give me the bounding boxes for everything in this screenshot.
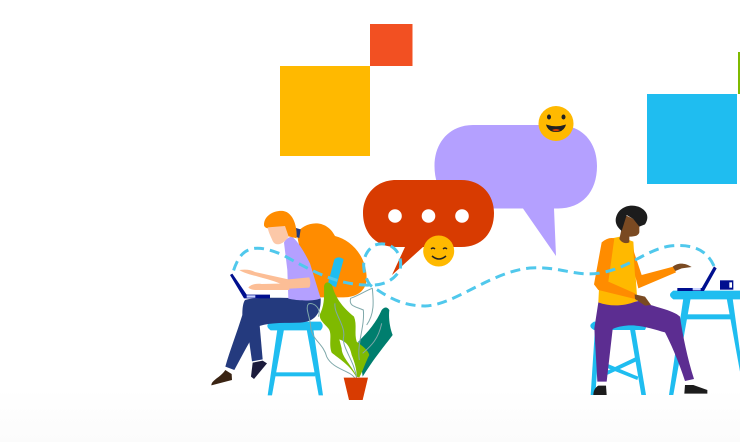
shoes bbox=[593, 386, 607, 395]
yellow square bbox=[280, 66, 370, 156]
woman on stool with laptop bbox=[211, 211, 367, 395]
mug bbox=[720, 280, 733, 290]
trousers bbox=[225, 298, 321, 370]
thin stems bbox=[307, 288, 382, 378]
hair tie bbox=[295, 228, 301, 238]
man at table with laptop bbox=[590, 206, 740, 395]
stool bbox=[267, 322, 323, 395]
potted plant bbox=[307, 282, 393, 400]
green square edge bbox=[738, 52, 740, 94]
hair bbox=[616, 206, 647, 231]
hand on thigh bbox=[635, 294, 651, 306]
pot bbox=[344, 378, 368, 400]
far trouser leg bbox=[247, 322, 263, 361]
face bbox=[268, 226, 289, 244]
smiling emoji on purple bubble bbox=[538, 106, 574, 141]
purple shirt bbox=[284, 237, 321, 301]
arms bbox=[239, 270, 310, 289]
blue chair back bbox=[328, 257, 344, 287]
laptop bbox=[677, 266, 717, 291]
orange backdrop blob bbox=[297, 223, 367, 297]
hair bbox=[264, 211, 297, 238]
neck and face bbox=[619, 215, 639, 243]
smiling emoji on red bubble bbox=[423, 236, 454, 266]
table bbox=[669, 291, 740, 395]
orange sleeve near bbox=[594, 238, 635, 299]
stool bbox=[590, 322, 646, 395]
yellow shirt bbox=[598, 237, 637, 305]
blue square bbox=[647, 94, 737, 184]
purple speech bubble bbox=[434, 125, 597, 256]
green leaf bbox=[320, 282, 369, 377]
trousers bbox=[594, 301, 694, 382]
dashed connection line bbox=[233, 244, 714, 306]
orange sleeve far bbox=[633, 250, 676, 288]
shoes bbox=[211, 370, 232, 385]
teal leaf bbox=[358, 307, 393, 377]
laptop bbox=[230, 274, 270, 298]
white gap in green leaf bbox=[339, 339, 357, 376]
red speech bubble with dots bbox=[363, 180, 494, 275]
red square bbox=[370, 24, 412, 66]
hand on keyboard bbox=[673, 264, 692, 271]
